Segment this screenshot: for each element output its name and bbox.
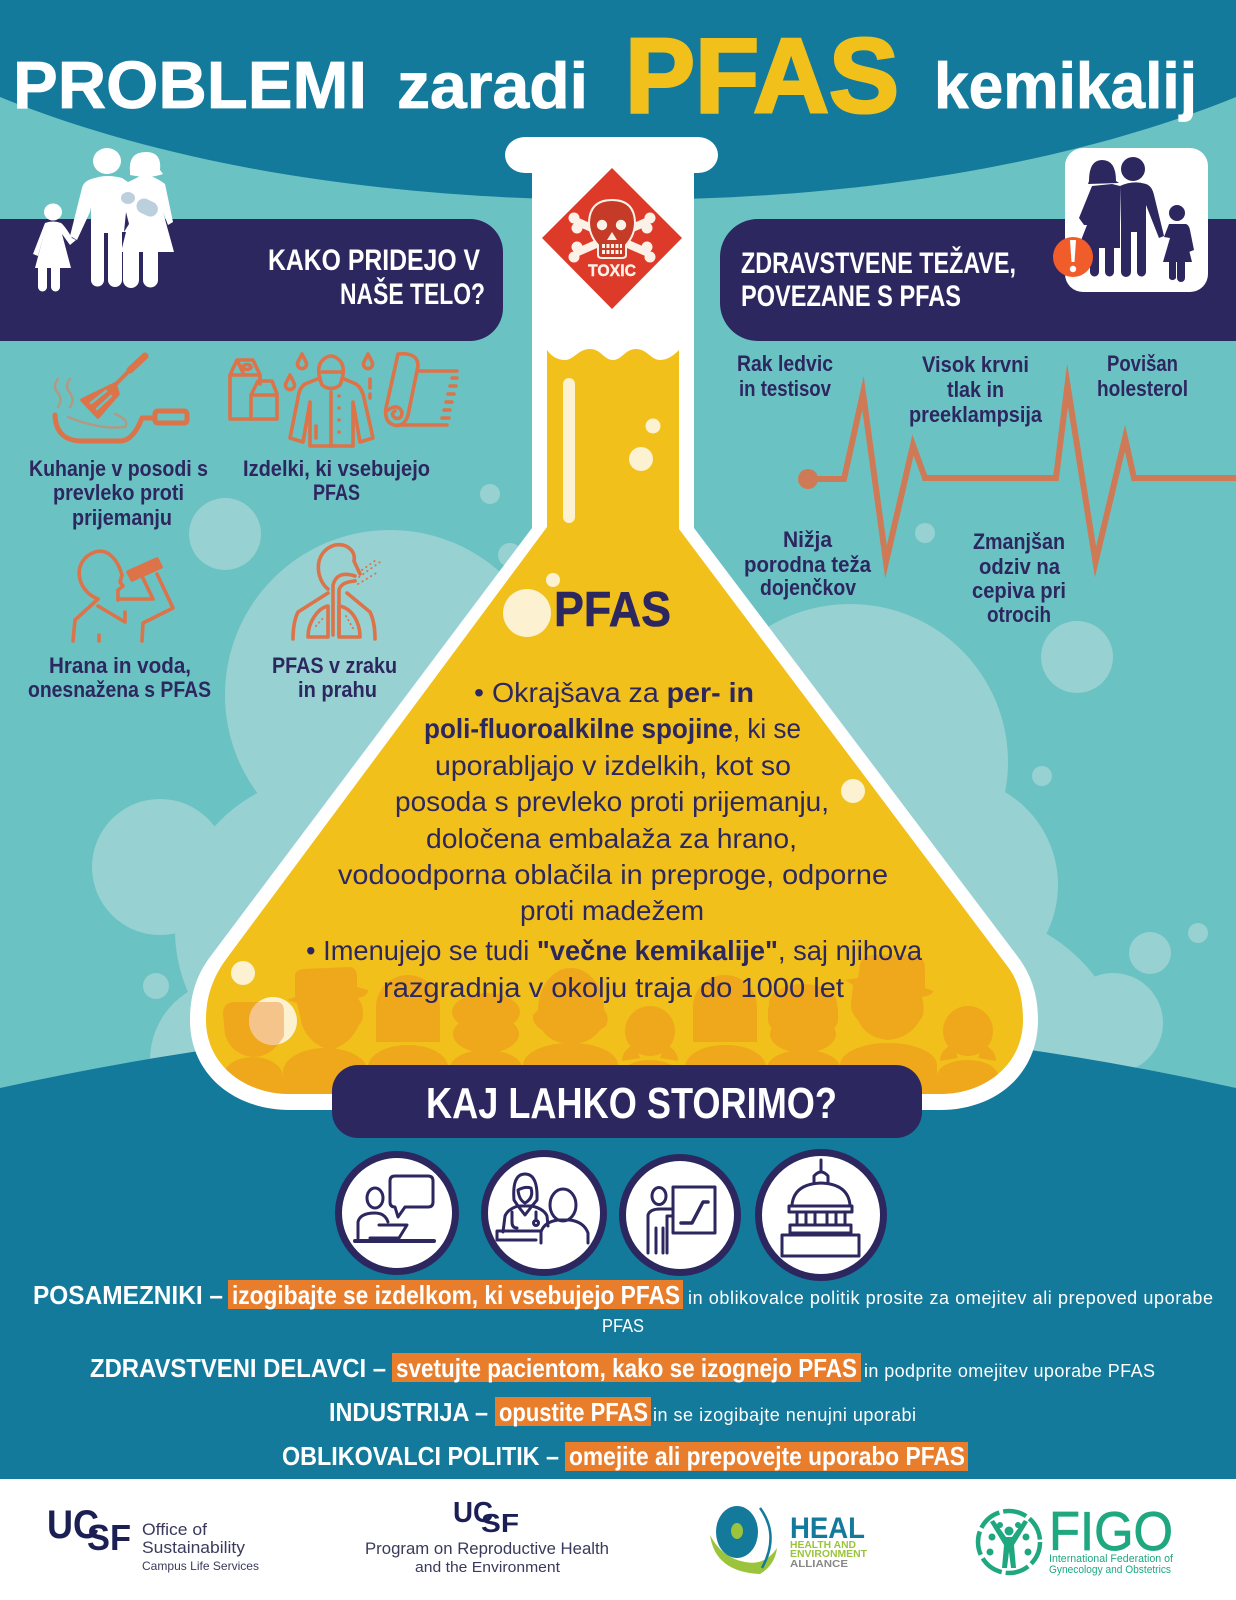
- logo: HEAL: ALLIANCE: [790, 1559, 848, 1570]
- icon: family with alert: [1053, 148, 1208, 292]
- pfas description text: • Imenujejo se tudi "večne kemikalije", saj njihova: [306, 935, 922, 966]
- title: [13, 17, 1197, 135]
- label: kidney cancer: Rak ledvic: [737, 351, 833, 376]
- label: cooking: prevleko proti: [53, 480, 184, 505]
- right heading text: POVEZANE S PFAS: [741, 280, 961, 313]
- action row: industry: [329, 1397, 916, 1427]
- icon: white family: [33, 148, 174, 292]
- title: kemikalij: [934, 49, 1197, 122]
- pfas description text: proti madežem: [520, 895, 704, 926]
- icon: industry presenter: [622, 1158, 738, 1272]
- action row: individuals: PFAS: [602, 1316, 644, 1336]
- left heading text: [268, 244, 485, 311]
- logo: FIGO: [978, 1500, 1174, 1576]
- action row: individuals: izogibajte se izdelkom, ki vsebujejo PFAS: [232, 1280, 680, 1310]
- action row: health professionals: svetujte pacientom, kako se izognejo PFAS: [396, 1353, 857, 1383]
- logo: UCSF Program on Reproductive Health: Program on Reproductive Health: [365, 1539, 609, 1558]
- right heading bar: [720, 219, 1236, 341]
- toxic label: TOXIC: [588, 261, 636, 280]
- label: food and water: [28, 653, 211, 702]
- icon: lungs: [293, 545, 380, 639]
- action row: policy makers: omejite ali prepovejte uporabo PFAS: [569, 1441, 965, 1471]
- label: vaccine response: otrocih: [987, 602, 1051, 627]
- action row: policy makers: OBLIKOVALCI POLITIK –: [282, 1441, 559, 1471]
- label: vaccine response: odziv na: [979, 554, 1061, 579]
- top dark band: [0, 0, 1236, 200]
- icon: health professional with patient: [484, 1154, 604, 1272]
- icon: person drinking: [73, 551, 173, 641]
- flask glass: [190, 137, 1038, 1110]
- pfas description text: • Okrajšava za per- in: [474, 677, 754, 708]
- title: zaradi: [397, 49, 588, 122]
- logo: FIGO: FIGO: [1049, 1500, 1173, 1562]
- action row: health professionals: in podprite omejitev uporabe PFAS: [864, 1361, 1155, 1381]
- pfas explanation: [306, 583, 922, 1003]
- label: cooking: [29, 456, 208, 530]
- what can we do heading: [332, 1065, 922, 1138]
- left heading bar: [0, 219, 503, 341]
- label: products: Izdelki, ki vsebujejo: [243, 456, 430, 481]
- pfas description text: vodoodporna oblačila in preproge, odporne: [338, 859, 888, 890]
- icon: products with PFAS: [230, 354, 457, 446]
- label: blood pressure: tlak in: [947, 377, 1004, 402]
- logo: UCSF Office of Sustainability: UC: [47, 1503, 99, 1547]
- pfas heading: PFAS: [554, 583, 671, 637]
- pfas description text: določena embalaža za hrano,: [426, 823, 797, 854]
- icon: non-stick pan: [55, 356, 187, 441]
- logo: HEAL: HEAL: [790, 1512, 865, 1545]
- skull: [589, 200, 635, 258]
- label: vaccine response: Zmanjšan: [973, 529, 1065, 554]
- flask bubbles: [231, 378, 865, 1045]
- panel: health problems: [720, 148, 1236, 627]
- label: birth weight: Nižja: [783, 527, 833, 552]
- logo: HEAL: HEALTH AND: [790, 1540, 856, 1551]
- label: food and water: Hrana in voda,: [49, 653, 191, 678]
- icon: capitol building: [758, 1152, 884, 1278]
- action row: policy makers: [282, 1441, 968, 1471]
- label: air and dust: in prahu: [298, 677, 377, 702]
- left heading text: KAKO PRIDEJO V: [268, 244, 480, 277]
- toxic hazard diamond: [542, 168, 682, 309]
- logo: UCSF Program on Reproductive Health: SF: [481, 1508, 519, 1538]
- crossbones: [568, 212, 656, 262]
- logo: UCSF Office of Sustainability: [47, 1503, 259, 1573]
- label: products: PFAS: [313, 480, 360, 505]
- pfas description text: razgradnja v okolju traja do 1000 let: [383, 972, 844, 1003]
- label: blood pressure: Visok krvni: [922, 352, 1029, 377]
- label: birth weight: porodna teža: [744, 552, 872, 577]
- action row: health professionals: ZDRAVSTVENI DELAVCI –: [90, 1353, 386, 1383]
- logo: UCSF Program on Reproductive Health: [365, 1497, 609, 1576]
- left heading text: NAŠE TELO?: [340, 277, 485, 311]
- logo: HEAL: ENVIRONMENT: [790, 1549, 867, 1560]
- label: blood pressure: [909, 352, 1043, 427]
- action row: industry: in se izogibajte nenujni uporabi: [653, 1405, 916, 1425]
- logo: UCSF Program on Reproductive Health: UC: [453, 1497, 493, 1529]
- label: vaccine response: [972, 529, 1066, 627]
- logo: FIGO: International Federation of: [1049, 1553, 1174, 1565]
- action row: industry: opustite PFAS: [499, 1397, 648, 1427]
- pfas description text: [306, 677, 922, 1003]
- logo: UCSF Office of Sustainability: Campus Life Services: [142, 1559, 259, 1573]
- label: kidney cancer: in testisov: [739, 376, 832, 401]
- icon: individual with laptop: [338, 1154, 456, 1272]
- title: PROBLEMI: [13, 48, 367, 123]
- label: cooking: prijemanju: [72, 505, 172, 530]
- crowd silhouettes: [223, 955, 998, 1094]
- logo: UCSF Office of Sustainability: Office of: [142, 1520, 207, 1539]
- label: products: [243, 456, 430, 505]
- panel: how they enter the body: [0, 148, 503, 702]
- pfas description text: posoda s prevleko proti prijemanju,: [395, 786, 829, 817]
- right heading text: [741, 246, 1016, 313]
- pfas description text: poli-fluoroalkilne spojine, ki se: [424, 713, 801, 744]
- label: kidney cancer: [737, 351, 833, 401]
- action row: individuals: [33, 1280, 1213, 1336]
- action row: individuals: POSAMEZNIKI –: [33, 1280, 223, 1310]
- label: birth weight: [744, 527, 872, 600]
- label: birth weight: dojenčkov: [760, 575, 857, 600]
- footer: [0, 1479, 1236, 1600]
- flask liquid: [206, 349, 1023, 1094]
- flask: [190, 137, 1038, 1120]
- action row: individuals: in oblikovalce politik prosite za omejitev ali prepoved uporabe: [688, 1288, 1213, 1308]
- logo: UCSF Office of Sustainability: Sustainability: [142, 1538, 246, 1557]
- label: cholesterol: [1097, 351, 1188, 401]
- action row: industry: INDUSTRIJA –: [329, 1397, 488, 1427]
- label: vaccine response: cepiva pri: [972, 578, 1066, 603]
- background bubbles: [92, 484, 1208, 1250]
- logo: FIGO: Gynecology and Obstetrics: [1049, 1564, 1171, 1576]
- logo: HEAL: [710, 1506, 867, 1574]
- label: cholesterol: Povišan: [1107, 351, 1178, 376]
- label: cooking: Kuhanje v posodi s: [29, 456, 208, 481]
- title: PFAS: [625, 17, 899, 135]
- label: air and dust: PFAS v zraku: [272, 653, 397, 678]
- label: air and dust: [272, 653, 397, 702]
- right heading text: ZDRAVSTVENE TEŽAVE,: [741, 246, 1016, 280]
- label: blood pressure: preeklampsija: [909, 402, 1043, 427]
- bottom dark band: [0, 1020, 1236, 1480]
- logo: UCSF Program on Reproductive Health: and the Environment: [415, 1559, 561, 1576]
- label: food and water: onesnažena s PFAS: [28, 677, 211, 702]
- pfas description text: uporabljajo v izdelkih, kot so: [435, 750, 791, 781]
- label: cholesterol: holesterol: [1097, 376, 1188, 401]
- what can we do heading: KAJ LAHKO STORIMO?: [426, 1079, 837, 1128]
- ecg line chart: [798, 385, 1236, 562]
- action row: health professionals: [90, 1353, 1155, 1383]
- logo: UCSF Office of Sustainability: SF: [87, 1517, 131, 1558]
